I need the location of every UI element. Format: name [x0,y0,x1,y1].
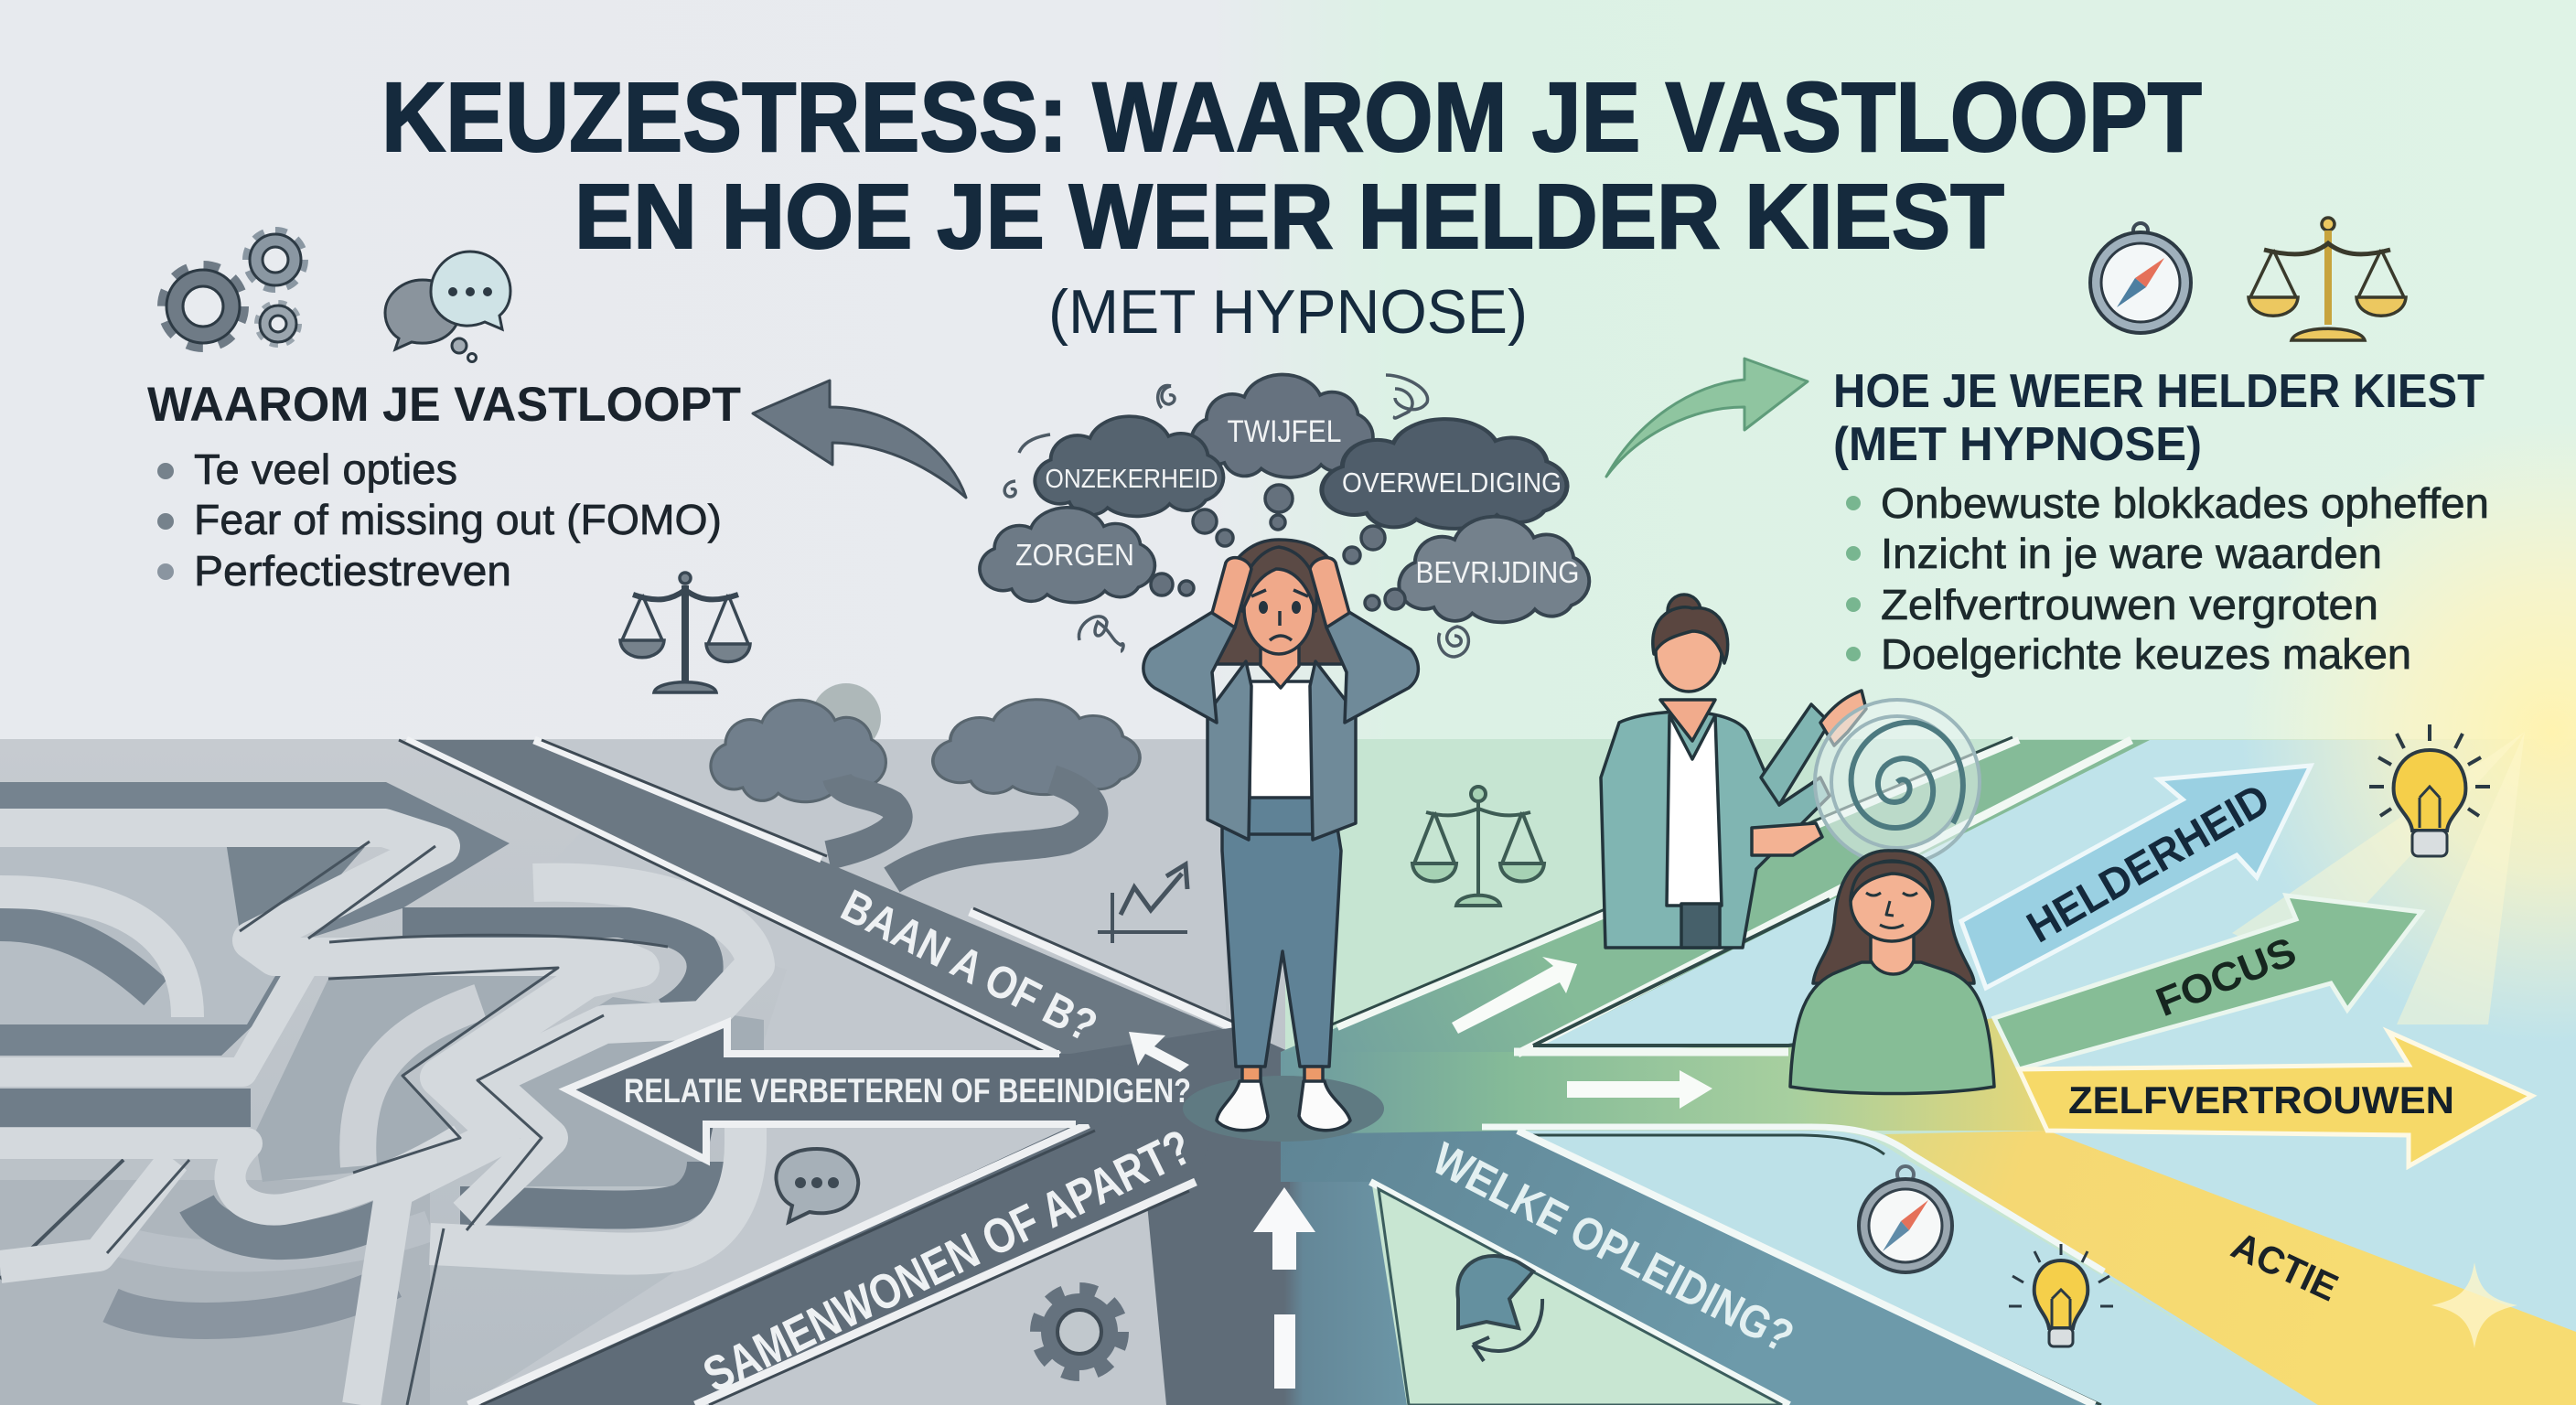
arrow: curved left [753,381,966,498]
cloud: Overweldiging [1322,419,1567,529]
arrow: pointer to Baan [1129,1032,1189,1072]
arrow: Relatie verbeteren of beeindigen: RELATIE VERBETEREN OF BEEINDIGEN? [624,1072,1191,1110]
gear: small [258,304,298,344]
arrow: Focus: FOCUS [2150,929,2302,1025]
clouds: worries [980,374,1589,622]
cloud: Onzekerheid [1035,416,1223,516]
title: (MET HYPNOSE) [1048,277,1528,347]
road: yellow Actie [1884,1131,2576,1405]
label: Samenwonen of apart: SAMENWONEN OF APART? [695,1120,1200,1403]
icon: scales green [1412,787,1544,906]
icon: lightbulb top right [2369,724,2490,856]
icon: cycle arrows [1457,1256,1542,1361]
list: causes: Fear of missing out (FOMO) [194,496,722,543]
arrow: Helderheid: HELDERHEID [2019,775,2278,952]
list: solutions: Zelfvertrouwen vergroten [1881,581,2378,628]
ground: right green half [1285,739,2576,1405]
road: Baan A of B [399,740,1299,1189]
arrow: Focus [1994,896,2421,1069]
road: green upper [1281,737,2150,1180]
label: Welke opleiding: WELKE OPLEIDING? [1424,1132,1802,1363]
label: Baan A of B: BAAN A OF B? [833,880,1105,1052]
gear: top [247,231,304,288]
icon: compass top [2090,223,2191,333]
cloud: Zorgen [980,508,1154,603]
figure: calm woman [1790,851,1994,1094]
icon: lightbulb lower [2009,1244,2113,1346]
icon: sparkle [2431,1262,2517,1348]
cloud: Twijfel [1191,374,1373,477]
arrow: Zelfvertrouwen: ZELFVERTROUWEN [2068,1078,2454,1121]
list: causes: Te veel opties [194,445,457,493]
ground: left grey half [0,739,1285,1405]
list: solutions: Doelgerichte keuzes maken [1881,630,2411,678]
heading: Hoe je weer helder kiest [1833,365,2485,471]
arrow: curved right [1606,359,1808,477]
icon: scales left [620,573,750,692]
heading: Waarom je vastloopt: WAAROM JE VASTLOOPT [147,378,741,432]
title [381,61,2202,347]
heading: Hoe je weer helder kiest: (MET HYPNOSE) [1833,418,2202,471]
list: solutions: Inzicht in je ware waarden [1881,530,2382,577]
panel: grey ground triangles between roads [468,740,1226,1405]
gear: large [164,267,242,346]
road: south central [1134,1070,1407,1405]
road: Samenwonen of apart [468,1124,1217,1405]
icon: scales gold [2249,218,2406,340]
title: KEUZESTRESS: WAAROM JE VASTLOOPT [381,61,2202,172]
sun glow [2232,421,2576,1043]
arrow: Helderheid [1961,766,2311,988]
icon: hypnosis spiral [1815,700,1980,864]
title: EN HOE JE WEER HELDER KIEST [574,166,2004,268]
road: central dashed arrow [1253,1187,1315,1389]
arrows: white direction arrows [1452,957,1712,1109]
icon: gear [1036,1289,1122,1375]
list: solutions [1846,479,2489,678]
road: Welke opleiding [1281,1127,2104,1405]
icon: chat bubbles [385,252,510,362]
squiggles [1004,375,1468,657]
cloud: Overweldiging: OVERWELDIGING [1342,467,1562,499]
thought bubbles [1151,485,1405,610]
figure: stressed woman [1143,540,1418,1142]
arrow: Zelfvertrouwen [2019,1032,2532,1166]
icon: compass lower [1859,1166,1952,1272]
figure: therapist [1601,595,1866,948]
icon: gears [164,231,304,346]
cloud: Twijfel: TWIJFEL [1228,414,1341,449]
label: Actie: ACTIE [2226,1223,2345,1310]
panel: labyrinth [0,782,764,1405]
arrow: Relatie verbeteren of beeindigen [567,1023,1208,1160]
cloud: Onzekerheid: ONZEKERHEID [1045,465,1218,494]
list: causes: Perfectiestreven [194,547,511,595]
cloud: Bevrijding: BEVRIJDING [1416,555,1579,589]
cloud: Zorgen: ZORGEN [1015,538,1134,572]
list: solutions: Onbewuste blokkades opheffen [1881,479,2489,527]
icon: smoke clouds and winding roads [711,683,1140,880]
list: causes [157,445,722,595]
heading: Hoe je weer helder kiest: HOE JE WEER HELDER KIEST [1833,365,2485,418]
panel: light blue ground right [1518,740,2576,1405]
panel: light green triangle bottom [1379,1189,1782,1405]
icon: rising chart [1098,864,1187,943]
cloud: Bevrijding [1399,517,1589,622]
icon: speech bubble [776,1149,858,1222]
